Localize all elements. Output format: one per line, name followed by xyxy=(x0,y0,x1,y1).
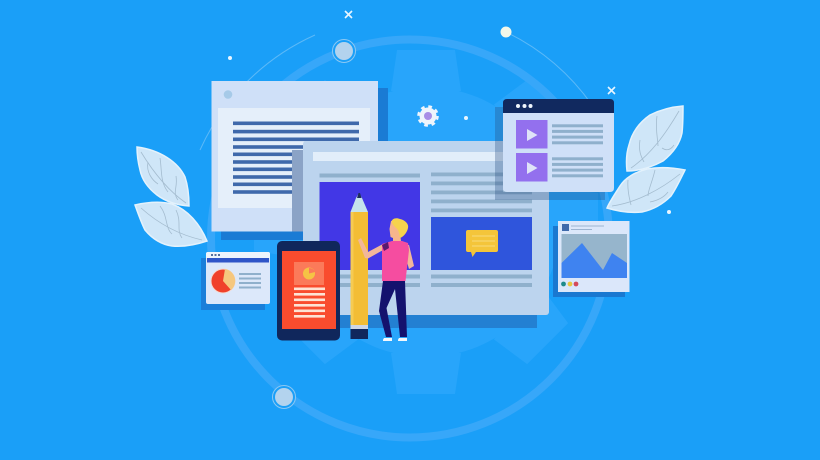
right column text lines xyxy=(431,172,532,212)
person sleeve xyxy=(382,242,389,251)
sparkle dots xyxy=(228,56,671,214)
orbit node bottom xyxy=(272,386,296,408)
person neck and face xyxy=(390,219,401,241)
pie card dots xyxy=(211,254,220,256)
person shoes xyxy=(383,338,407,341)
leaf: lower left xyxy=(135,202,207,246)
pencil body xyxy=(350,212,368,325)
tablet body xyxy=(277,241,340,340)
photo mountains xyxy=(562,243,627,278)
document marker xyxy=(224,90,232,99)
window shadow xyxy=(340,315,537,328)
leaves right xyxy=(607,106,685,212)
video window body xyxy=(503,110,614,192)
cross marks xyxy=(345,11,615,94)
leaf: upper right xyxy=(626,106,683,171)
right image block xyxy=(431,217,532,270)
leaf: lower right xyxy=(607,168,685,212)
panel: video window xyxy=(495,99,614,200)
window shadow on document xyxy=(292,150,303,232)
tablet screen xyxy=(282,251,336,329)
photo sky xyxy=(562,234,627,278)
video thumbnail 2 xyxy=(516,153,548,182)
panel: text document xyxy=(212,81,388,240)
window address bar xyxy=(313,152,538,161)
photo card shadow xyxy=(553,226,625,297)
thin orbit arcs xyxy=(200,32,592,150)
tablet device xyxy=(277,241,340,340)
pie card body xyxy=(206,252,270,304)
white planet dot xyxy=(500,26,512,38)
panel: main browser window xyxy=(292,141,549,328)
pie card shadow xyxy=(201,258,265,310)
video window title bar xyxy=(503,99,614,113)
photo colour dots xyxy=(561,282,578,286)
video thumbnail 1 xyxy=(516,120,548,148)
document inner page xyxy=(218,108,370,208)
person trousers xyxy=(379,281,407,337)
left column heading xyxy=(320,174,420,178)
panel: photo card xyxy=(553,221,630,297)
title bar dots xyxy=(516,104,532,108)
pencil lead xyxy=(357,193,362,198)
pencil tip xyxy=(350,193,368,212)
window frame xyxy=(303,141,549,315)
pie card top strip xyxy=(206,252,270,258)
person right arm xyxy=(405,245,414,269)
tablet text lines xyxy=(294,288,325,318)
panel: pie chart card xyxy=(201,252,270,310)
tablet pie icon xyxy=(303,268,315,280)
icon: chat bubble xyxy=(466,230,498,257)
icon: small settings gear xyxy=(418,106,438,126)
bottom text lines xyxy=(320,274,532,287)
video window shadow xyxy=(495,107,605,200)
pencil ferrule xyxy=(350,325,368,329)
tablet chart tile xyxy=(294,262,324,285)
avatar square xyxy=(562,224,569,231)
document text lines xyxy=(233,122,359,194)
document shadow xyxy=(221,88,388,240)
caption lines xyxy=(571,226,604,230)
left image block xyxy=(320,182,420,270)
background gear xyxy=(254,50,598,394)
person left arm xyxy=(358,238,385,258)
icon: giant pencil xyxy=(350,193,368,339)
document sheet xyxy=(212,81,378,232)
orbit node top xyxy=(332,40,356,62)
orbit ring xyxy=(211,40,609,438)
pie legend lines xyxy=(239,273,261,288)
pie card bar xyxy=(207,258,269,262)
person hair xyxy=(392,218,408,238)
pie chart xyxy=(211,269,235,293)
person shirt xyxy=(382,241,409,281)
video text lines xyxy=(552,124,603,177)
pencil highlight xyxy=(350,212,354,325)
leaves left xyxy=(135,147,207,246)
photo card body xyxy=(558,221,630,292)
leaf: upper left xyxy=(137,147,189,206)
pencil eraser xyxy=(350,329,368,339)
person with pencil xyxy=(358,218,414,341)
